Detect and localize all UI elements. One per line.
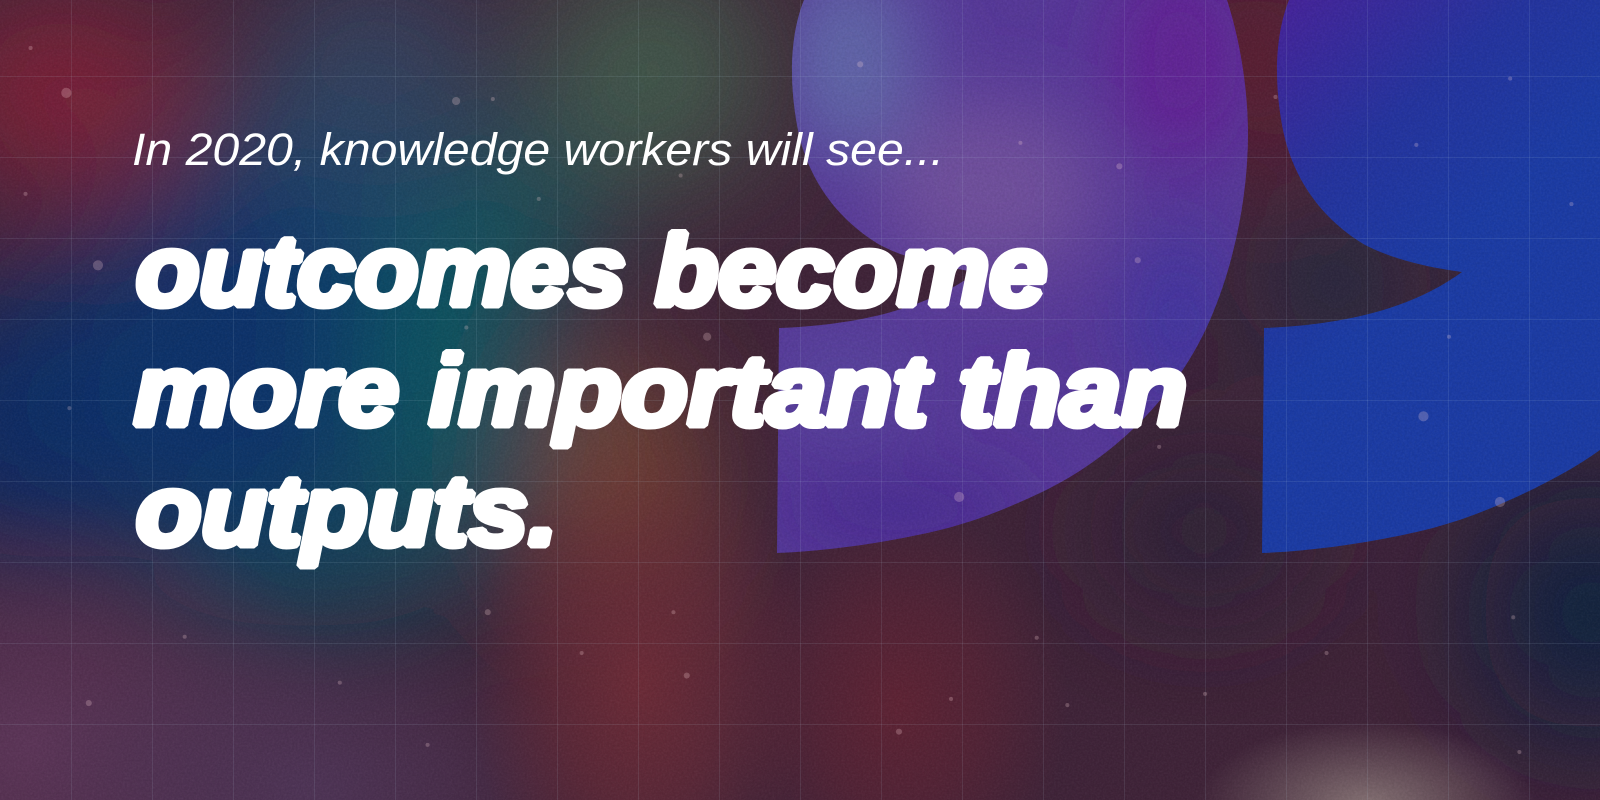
icon: right quotation mark	[1262, 0, 1600, 553]
headline line 1: outcomes become	[136, 215, 1047, 327]
icon: left quotation mark	[770, 0, 1250, 553]
subheading: In 2020, knowledge workers will see...	[132, 124, 944, 175]
headline line 2: more important than	[134, 335, 1187, 447]
headline line 3: outputs.	[136, 455, 558, 567]
headline	[134, 215, 1187, 567]
